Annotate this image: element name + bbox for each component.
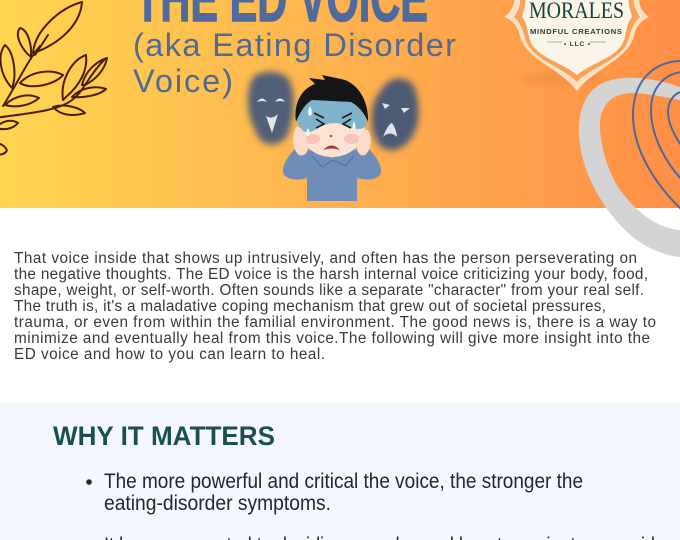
icon: botanical branch [0, 2, 107, 155]
intro paragraph: That voice inside that shows up intrusively, and often has the person perseverating on [14, 250, 637, 267]
mouth [323, 146, 340, 150]
cheeks [304, 134, 320, 144]
panel: why it matters [0, 403, 680, 540]
bullet one: eating-disorder symptoms. [104, 492, 331, 515]
right cheek [344, 134, 360, 144]
eyebrows [314, 113, 352, 118]
logo shadow [523, 72, 607, 86]
logo tagline: MINDFUL CREATIONS [530, 27, 622, 36]
right hand [357, 130, 371, 155]
intro paragraph: The truth is, it's a maladative coping mechanism that grew out of societal pressures, [14, 298, 606, 315]
bullet one: The more powerful and critical the voice, the stronger the [104, 470, 583, 493]
bullet one [86, 470, 583, 515]
sweat drops [306, 106, 356, 136]
left hand [293, 127, 308, 155]
decorative blue arcs [633, 61, 680, 217]
subtitle: Voice) [133, 63, 233, 99]
sweater [283, 148, 381, 201]
illustration: smiling shadow voice [248, 72, 294, 144]
orange inset line [514, 0, 640, 82]
subtitle: (aka Eating Disorder [133, 27, 456, 63]
panel background [0, 403, 680, 540]
section heading: WHY IT MATTERS [53, 421, 275, 451]
intro paragraph: shape, weight, or self-worth. Often sounds like a separate "character" from your real self. [14, 282, 644, 299]
logo: Morales Mindful Creations [504, 0, 649, 91]
intro paragraph: the negative thoughts. The ED voice is the harsh internal voice criticizing your body, food, [14, 266, 648, 283]
intro paragraph [14, 250, 656, 363]
illustration: frowning shadow voice [371, 78, 419, 150]
decorative grey ring [579, 78, 680, 257]
illustration: distressed person covering ears [283, 75, 381, 201]
worried blue shading [297, 100, 367, 132]
header banner background [0, 0, 680, 208]
intro paragraph: ED voice and how to you can learn to heal. [14, 346, 325, 363]
nose [330, 135, 332, 137]
hair [295, 75, 368, 122]
collar [312, 156, 354, 167]
eyes [316, 119, 351, 128]
logo suffix: • LLC • [564, 41, 591, 48]
intro paragraph: minimize and eventually heal from this voice.The following will give more insight into the [14, 330, 650, 347]
inner cream badge [522, 0, 632, 75]
face [299, 97, 365, 157]
intro paragraph: trauma, or even from within the familial environment. The good news is, there is a way to [14, 314, 656, 331]
subtitle [133, 27, 456, 99]
outer badge [504, 0, 649, 91]
